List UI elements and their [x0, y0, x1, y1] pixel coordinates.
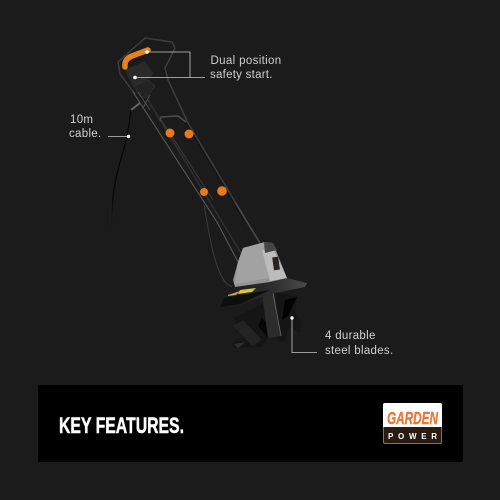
callout: 10m cable [69, 114, 130, 140]
motor housing [233, 242, 287, 287]
logo: Garden Power [383, 403, 442, 444]
cable clip [131, 103, 140, 110]
label text: 4 durable [325, 330, 376, 342]
logo: Garden Power: POWER [388, 432, 437, 441]
power cable [111, 110, 131, 232]
lower right handle rail [235, 202, 260, 243]
callout: 4 durable steel blades [290, 316, 393, 357]
orange grip [125, 50, 148, 67]
product: garden tiller [118, 38, 307, 348]
shield [220, 278, 307, 309]
tines and blades [231, 292, 302, 348]
callout: dual position safety start: safety start. [210, 69, 273, 81]
heading: KEY FEATURES. [59, 413, 184, 438]
callout: 4 durable steel blades: steel blades. [325, 345, 393, 357]
motor power lead [204, 205, 232, 287]
cross bar handle [160, 116, 186, 122]
leader line [292, 318, 317, 352]
switch box [125, 61, 153, 87]
motor badge [272, 257, 280, 270]
logo: Garden Power: GARDEN [387, 408, 438, 428]
leader lines [135, 52, 205, 78]
callout: 10m cable: cable. [69, 128, 102, 140]
footer banner [38, 385, 463, 462]
yellow warning labels [228, 291, 240, 296]
leader line [108, 136, 128, 138]
drive shaft [262, 292, 281, 338]
orange knobs [166, 128, 174, 138]
label text: Dual position [210, 55, 282, 67]
callout: dual position safety start [133, 50, 282, 81]
label text: 10m [70, 114, 93, 126]
left handle rails [133, 92, 238, 262]
handle outer loop [118, 38, 247, 222]
